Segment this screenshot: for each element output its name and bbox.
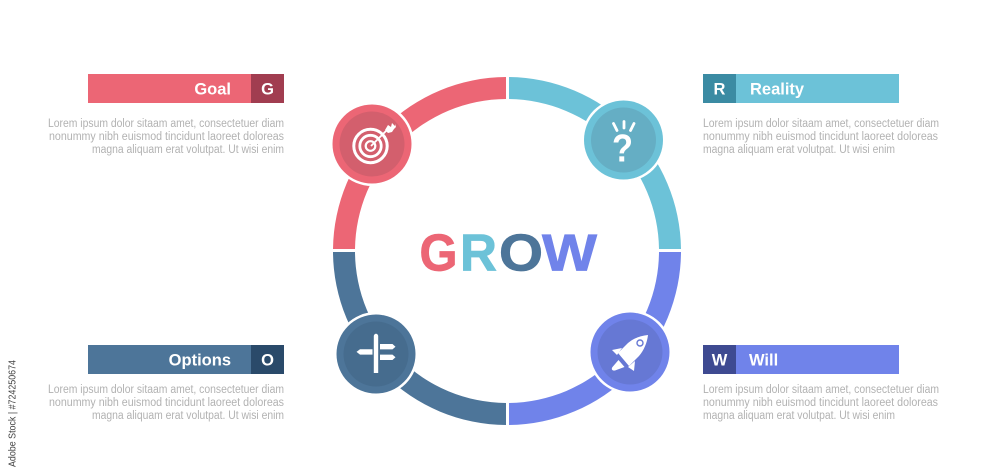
icon node: Options signpost bbox=[334, 312, 418, 396]
text block: Options: Lorem ipsum dolor sitaam amet, consectetuer diam bbox=[48, 384, 284, 396]
ring: four coloured quadrant arcs bbox=[333, 77, 681, 425]
heading bar: Options: O bbox=[261, 352, 274, 370]
text block: Goal bbox=[48, 118, 284, 156]
heading bar: Reality bbox=[703, 74, 899, 103]
icon node: Goal target bbox=[330, 102, 414, 186]
panel: Goal bbox=[48, 74, 284, 156]
title: GROW: O bbox=[499, 224, 543, 282]
heading bar: Goal bbox=[88, 74, 284, 103]
icon node: Reality question mark bbox=[582, 98, 666, 182]
title: GROW: W bbox=[542, 224, 598, 282]
text block: Options: magna aliquam erat volutpat. Ut wisi enim bbox=[92, 410, 284, 422]
heading bar: Will: Will bbox=[749, 352, 778, 370]
text block: Goal: nonummy nibh euismod tincidunt laoreet doloreas bbox=[49, 131, 284, 143]
heading bar: Reality: R bbox=[714, 80, 726, 98]
text block: Options: nonummy nibh euismod tincidunt laoreet doloreas bbox=[49, 397, 284, 409]
text block: Goal: Lorem ipsum dolor sitaam amet, consectetuer diam bbox=[48, 118, 284, 130]
text block: Will: nonummy nibh euismod tincidunt laoreet doloreas bbox=[703, 397, 938, 409]
heading bar: Goal: G bbox=[261, 80, 274, 98]
heading bar: Goal: Goal bbox=[194, 80, 231, 98]
heading bar: Reality: Reality bbox=[750, 80, 805, 98]
panel: Will bbox=[703, 345, 939, 422]
panel: Reality bbox=[703, 74, 939, 156]
text block: Will bbox=[703, 384, 939, 422]
title: GROW: G bbox=[420, 224, 458, 282]
panel: Options bbox=[48, 345, 284, 422]
heading bar: Will bbox=[703, 345, 899, 374]
heading bar: Options: Options bbox=[169, 352, 231, 370]
heading bar: Will: W bbox=[712, 352, 728, 370]
icon node: Reality question mark: ? bbox=[612, 128, 633, 170]
title: GROW bbox=[420, 224, 598, 282]
text block: Reality: nonummy nibh euismod tincidunt laoreet doloreas bbox=[703, 131, 938, 143]
stock image credit: Adobe Stock | #724250674 bbox=[6, 360, 18, 467]
text block: Will: Lorem ipsum dolor sitaam amet, consectetuer diam bbox=[703, 384, 939, 396]
text block: Options bbox=[48, 384, 284, 422]
text block: Will: magna aliquam erat volutpat. Ut wisi enim bbox=[703, 410, 895, 422]
heading bar: Options bbox=[88, 345, 284, 374]
text block: Goal: magna aliquam erat volutpat. Ut wisi enim bbox=[92, 144, 284, 156]
text block: Reality: Lorem ipsum dolor sitaam amet, consectetuer diam bbox=[703, 118, 939, 130]
text block: Reality: magna aliquam erat volutpat. Ut wisi enim bbox=[703, 144, 895, 156]
title: GROW: R bbox=[460, 224, 497, 282]
text block: Reality bbox=[703, 118, 939, 156]
icon node: Will rocket bbox=[588, 310, 672, 394]
